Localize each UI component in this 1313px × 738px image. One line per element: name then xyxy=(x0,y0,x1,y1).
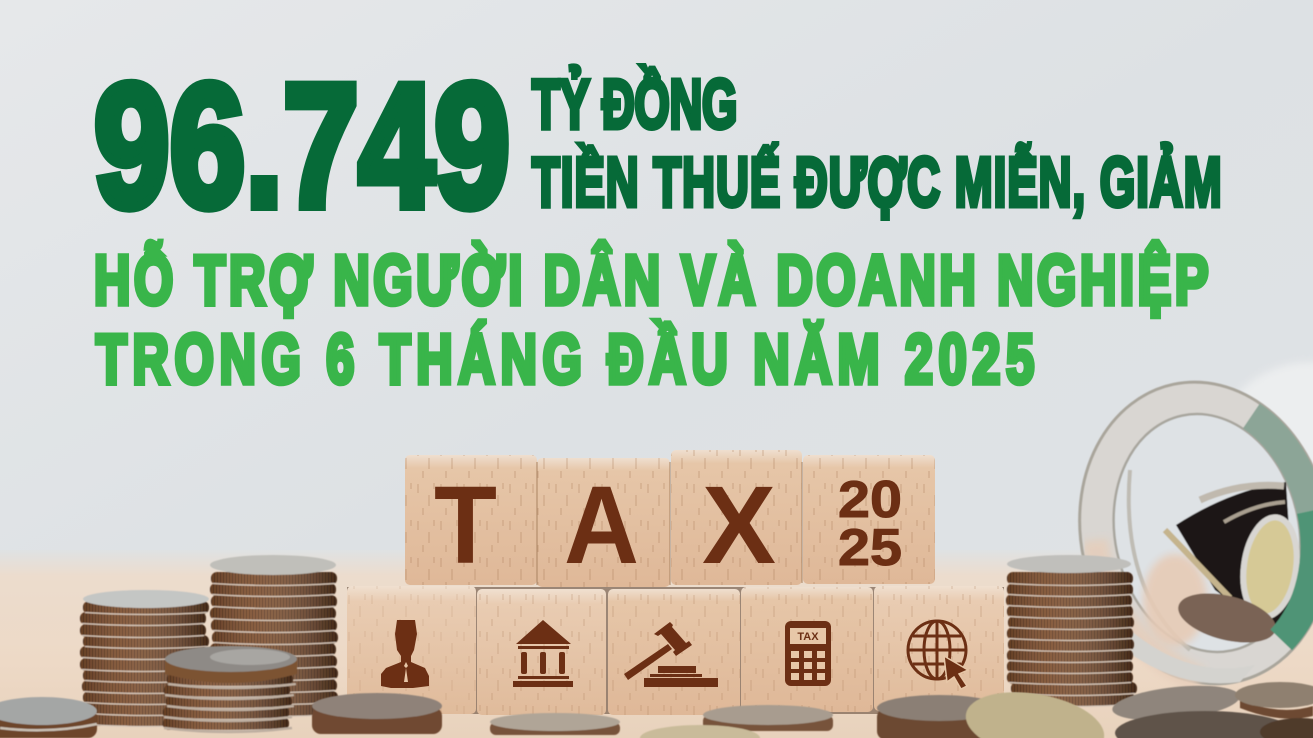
coin stack: right xyxy=(1006,555,1137,706)
title: big number: 96.749 xyxy=(94,49,510,244)
heading: unit and description: TIỀN THUẾ ĐƯỢC MIỄN, GIẢM xyxy=(532,142,1222,221)
glass jar with coins xyxy=(1052,343,1313,707)
icon: bank xyxy=(513,620,573,687)
block letters: TAX 2025: A xyxy=(564,464,639,587)
block letters: TAX 2025: 25 xyxy=(838,519,902,577)
wooden blocks: bottom row xyxy=(347,586,1004,715)
block letters: TAX 2025: X xyxy=(702,464,776,587)
coin stack: front xyxy=(163,646,297,732)
icon: gavel xyxy=(624,622,718,687)
subtitle xyxy=(94,241,1209,398)
subtitle: HỖ TRỢ NGƯỜI DÂN VÀ DOANH NGHIỆP xyxy=(94,241,1209,319)
foreground coins xyxy=(0,680,1313,738)
heading: unit and description: TỶ ĐỒNG xyxy=(532,64,737,143)
icon: calculator: TAX xyxy=(797,631,819,643)
icon: businessman xyxy=(381,620,429,688)
block letters: TAX 2025: 20 xyxy=(838,471,902,529)
wooden blocks: top row xyxy=(347,450,1004,714)
coin stack: short left xyxy=(80,590,211,726)
coin stack: tall left xyxy=(210,555,338,716)
icon: globe with cursor xyxy=(908,621,968,689)
heading: unit and description xyxy=(532,64,1222,221)
block letters: TAX 2025 xyxy=(434,464,902,587)
icon: calculator xyxy=(785,621,831,686)
subtitle: TRONG 6 THÁNG ĐẦU NĂM 2025 xyxy=(96,320,1034,398)
block letters: TAX 2025: T xyxy=(434,464,497,587)
